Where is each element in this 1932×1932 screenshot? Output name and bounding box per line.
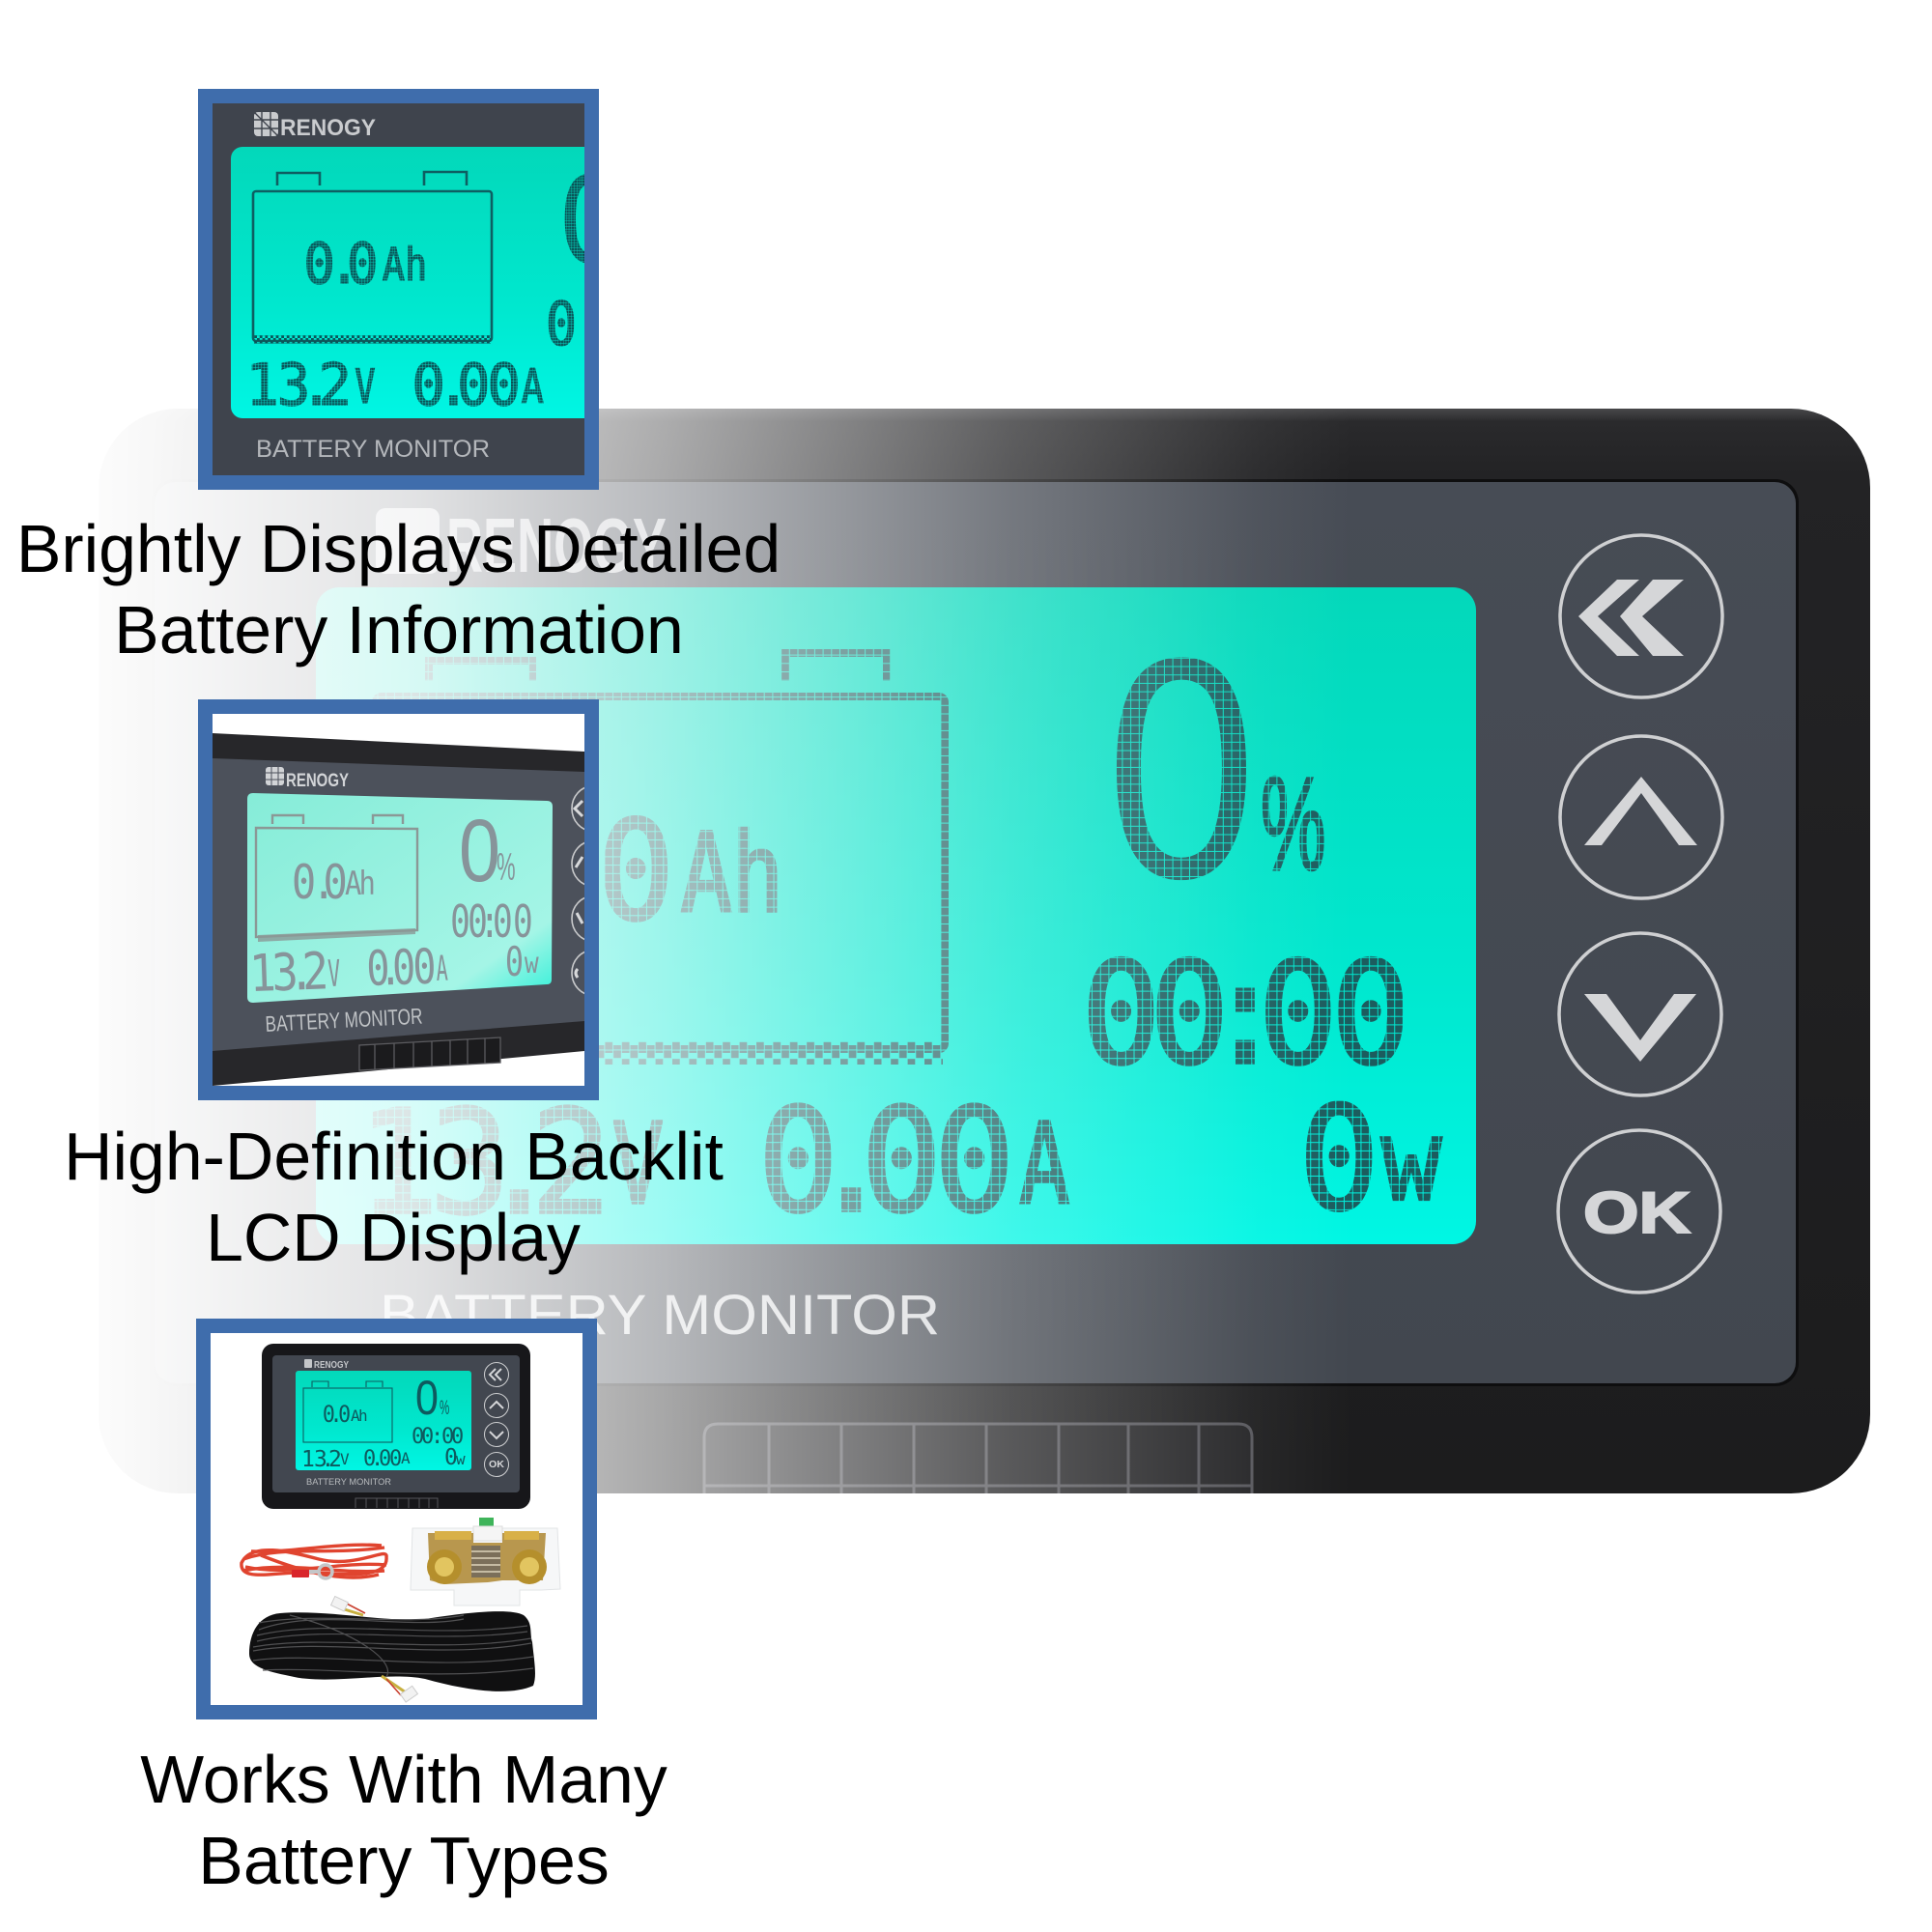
kit monitor logo: RENOGY (314, 1360, 349, 1371)
battery icon (376, 653, 945, 1049)
percent reading: 0 (1106, 593, 1257, 945)
thumbnail 1 logo: RENOGY (280, 115, 376, 141)
thumbnail 3 white ground (211, 1333, 582, 1705)
battery capacity reading: A (681, 810, 732, 937)
brass shunt (411, 1518, 560, 1605)
current reading: A (1019, 1100, 1069, 1229)
thumbnail 2 logo: RENOGY (286, 771, 349, 791)
kit monitor readings: Ah (351, 1406, 368, 1425)
kit monitor panel (272, 1355, 520, 1492)
kit monitor vent (355, 1498, 438, 1508)
cable tails and plugs (338, 1607, 406, 1692)
thumbnail 1 readings: 0.00 (412, 352, 521, 418)
thumbnail 2 battery icon (256, 815, 417, 937)
thumbnail 1 label: BATTERY MONITOR (256, 436, 490, 463)
red wire with ring terminal (242, 1545, 386, 1578)
thumbnail 2 vent (359, 1037, 500, 1070)
red sleeve (292, 1570, 309, 1577)
power reading: w (1381, 1095, 1442, 1227)
vent slots (704, 1424, 1252, 1493)
bezel recess line (152, 479, 1799, 1386)
thumbnail 1: zoomed display (205, 97, 621, 483)
caption 2: LCD Display (206, 1200, 581, 1275)
thumbnail 2 readings: w (525, 948, 539, 980)
kit monitor readings: w (456, 1450, 466, 1468)
kit monitor readings (303, 1380, 466, 1466)
kit monitor readings: 00:00 (412, 1425, 464, 1449)
panel logo: RENOGY (446, 502, 667, 588)
thumbnail 2 white ground (213, 714, 584, 1086)
kit monitor label: BATTERY MONITOR (306, 1477, 391, 1488)
button: back (1560, 535, 1722, 697)
power reading (1299, 1075, 1442, 1242)
thumbnail 2 readings: % (497, 845, 516, 889)
thumbnail 2 bezel (213, 733, 584, 1086)
black communication cable (249, 1597, 535, 1702)
cable coil mass (249, 1611, 535, 1691)
thumbnail 2 logo (266, 767, 349, 786)
thumbnail 2 readings: 0 (459, 802, 500, 901)
thumbnail 3 frame (203, 1325, 589, 1712)
thumbnail 1 readings: 0 (561, 148, 621, 289)
kit monitor readings: A (401, 1449, 411, 1467)
clear base (411, 1528, 560, 1605)
thumbnail 2 level band (258, 928, 415, 942)
kit monitor battery icon (303, 1381, 392, 1442)
current reading: 0.00 (758, 1077, 1014, 1244)
kit monitor (262, 1344, 530, 1509)
device bezel (99, 409, 1870, 1493)
thumbnail 2: angled device (205, 707, 612, 1094)
kit monitor buttons (485, 1362, 508, 1476)
thumbnail 1 panel (213, 103, 584, 475)
battery capacity reading: h (732, 810, 783, 937)
thumbnail 1 screen (231, 147, 617, 418)
thumbnail 1 readings (251, 174, 584, 407)
kit monitor readings: 13.2 (301, 1447, 342, 1472)
thumbnail 1 readings: V (355, 359, 375, 415)
thumbnail 2 readings: A (436, 948, 449, 989)
thumbnail 2 frame (205, 707, 591, 1094)
thumbnail 1 level band (254, 335, 491, 344)
battery capacity reading (446, 793, 783, 952)
kit monitor readings: 0.0 (323, 1402, 351, 1428)
caption 3: Works With Many (140, 1742, 668, 1817)
thumbnail 3: kit contents (203, 1325, 589, 1712)
thumbnail 2 readings: 00:00 (450, 895, 533, 948)
voltage reading: 13.2 (358, 1079, 611, 1246)
button: OK (1558, 1130, 1720, 1293)
thumbnail 1 readings: 0 (546, 289, 577, 359)
caption 1: Battery Information (114, 592, 684, 668)
voltage reading: V (611, 1100, 664, 1230)
kit monitor readings: 0.00 (363, 1447, 402, 1471)
white module (473, 1526, 502, 1541)
thumbnail 2 readings: V (327, 952, 341, 996)
kit monitor logo (304, 1359, 349, 1368)
power reading: 0 (1299, 1075, 1379, 1242)
front panel (155, 482, 1796, 1383)
time reading: 00:00 (1082, 932, 1410, 1096)
button: up (1560, 736, 1722, 898)
left white fade over device (87, 401, 1354, 1502)
thumbnail 2 screen (247, 793, 553, 1003)
thumbnail 2 buttons (571, 786, 584, 995)
thumbnail 2 readings: 0 (505, 938, 524, 985)
thumbnail 2 readings: 13.2 (248, 941, 329, 1004)
thumbnail 2 readings: 0.0 (292, 855, 348, 910)
thumbnail 1 readings: Ah (383, 240, 427, 291)
percent reading: % (1261, 749, 1325, 898)
green connector (479, 1518, 494, 1526)
thumbnail 1 readings: A (522, 359, 544, 414)
kit monitor screen (296, 1371, 471, 1470)
brass plates (428, 1533, 546, 1584)
thumbnail 2 readings: 0.00 (365, 938, 437, 997)
LCD screen (316, 587, 1476, 1244)
panel logo (376, 502, 667, 588)
kit monitor readings: V (340, 1450, 350, 1468)
kit monitor OK: OK (489, 1460, 505, 1470)
thumbnail 2 panel (213, 758, 584, 1051)
battery monitor label: BATTERY MONITOR (380, 1284, 940, 1347)
caption 1: Brightly Displays Detailed (16, 511, 781, 586)
kit monitor readings: % (440, 1396, 449, 1419)
caption 2: High-Definition Backlit (64, 1119, 724, 1194)
kit monitor button glyphs (490, 1369, 503, 1438)
main battery monitor device (87, 401, 1870, 1502)
thumbnail 2 readings: Ah (345, 866, 376, 903)
thumbnail 1 battery icon (253, 172, 492, 341)
shunt slots (471, 1546, 500, 1577)
thumbnail 1 logo (254, 112, 375, 136)
percent reading (1106, 593, 1325, 945)
button: down (1559, 933, 1721, 1095)
battery level band (379, 1041, 943, 1065)
brass bolts (427, 1549, 462, 1584)
kit monitor bezel (262, 1344, 530, 1509)
caption 3: Battery Types (198, 1823, 610, 1898)
ring lug (319, 1565, 332, 1578)
thumbnail 1 frame (205, 97, 591, 483)
thumbnail 1 readings: 13.2 (246, 352, 352, 418)
kit monitor readings: 0 (444, 1445, 458, 1470)
thumbnail 2 readings (254, 819, 539, 991)
thumbnail 2 button glyphs (575, 801, 582, 978)
kit monitor readings: 0 (415, 1371, 439, 1425)
button: OK: OK (1583, 1180, 1690, 1245)
thumbnail 1 readings: 0.0 (303, 232, 378, 297)
battery capacity reading: 0.0 (446, 793, 674, 952)
thumbnail 2 label: BATTERY MONITOR (265, 1003, 423, 1037)
